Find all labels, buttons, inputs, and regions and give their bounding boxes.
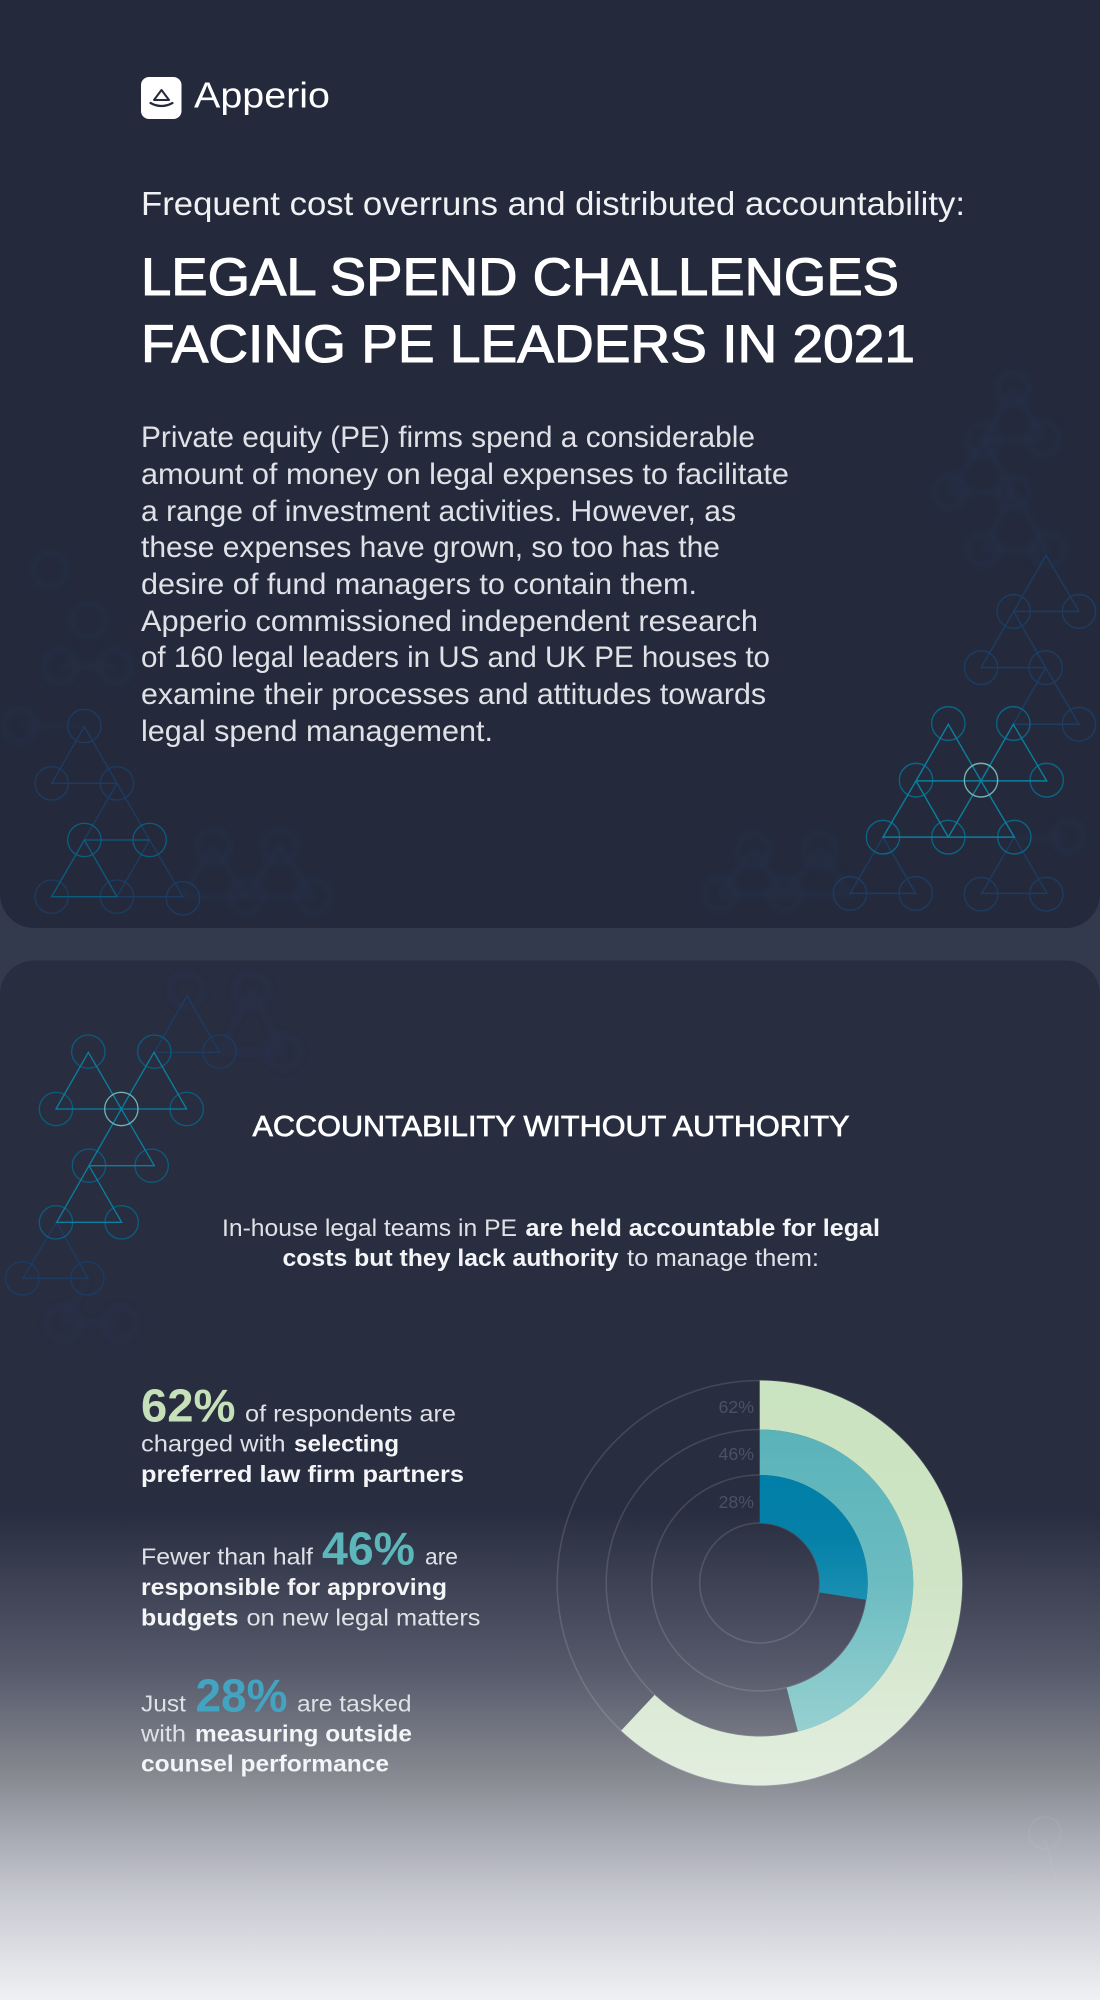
chart label: 62%: 62% <box>718 1397 754 1417</box>
subtitle: Frequent cost overruns and distributed accountability: <box>141 185 965 222</box>
intro paragraph <box>141 421 789 748</box>
stat: 46%: on new legal matters <box>246 1604 480 1630</box>
stat: 28%: measuring outside <box>195 1720 412 1746</box>
intro paragraph: of 160 legal leaders in US and UK PE houses to <box>141 641 770 674</box>
stat: 28% <box>140 1670 412 1776</box>
stat: 62%: of respondents are <box>245 1400 456 1426</box>
chart arc: 62% <box>621 1380 962 1785</box>
stat: 46%: 46% <box>322 1522 415 1574</box>
stat: 46% <box>141 1522 480 1630</box>
section intro text <box>222 1215 880 1272</box>
intro paragraph: Private equity (PE) firms spend a considerable <box>141 421 755 454</box>
stat: 46%: are <box>425 1544 458 1570</box>
stat: 28%: are tasked <box>297 1690 412 1716</box>
panel: intro <box>0 0 1100 928</box>
section intro text: In-house legal teams in PE <box>222 1215 517 1242</box>
intro paragraph: examine their processes and attitudes towards <box>141 678 766 711</box>
section intro text: are held accountable for legal <box>526 1215 880 1242</box>
title: LEGAL SPEND CHALLENGES <box>141 248 899 307</box>
logo wordmark: Apperio <box>194 74 330 116</box>
stat: 28%: with <box>140 1720 186 1746</box>
stat: 28%: Just <box>141 1690 186 1716</box>
radial bar chart <box>557 1380 962 1786</box>
stat: 62%: charged with <box>141 1430 286 1456</box>
section intro text: costs but they lack authority <box>282 1245 619 1272</box>
panel: accountability without authority <box>0 960 1100 2000</box>
icon: Apperio mark <box>141 77 182 119</box>
stat: 28%: 28% <box>196 1670 288 1722</box>
chart label: 28%: 28% <box>718 1492 754 1512</box>
stat: 28%: counsel performance <box>141 1750 389 1776</box>
stat: 46%: budgets <box>141 1604 238 1630</box>
chart arc: 28% <box>760 1475 868 1600</box>
intro paragraph: Apperio commissioned independent research <box>141 605 758 638</box>
pattern: faint lower-right network <box>997 1817 1097 1910</box>
chart arc: 46% <box>760 1429 913 1732</box>
title: FACING PE LEADERS IN 2021 <box>141 315 915 374</box>
pattern: left triangle network <box>3 553 330 915</box>
intro paragraph: desire of fund managers to contain them. <box>141 568 697 601</box>
section heading: ACCOUNTABILITY WITHOUT AUTHORITY <box>252 1111 850 1143</box>
section intro text: to manage them: <box>627 1245 819 1272</box>
logo <box>141 74 330 119</box>
pattern: upper-left triangle network <box>6 973 300 1340</box>
intro paragraph: legal spend management. <box>141 715 493 748</box>
stat: 46%: responsible for approving <box>141 1574 447 1600</box>
stat: 62%: selecting <box>294 1430 399 1456</box>
stat: 62% <box>141 1380 464 1487</box>
intro paragraph: a range of investment activities. However, as <box>141 495 736 528</box>
stat: 62%: 62% <box>141 1380 236 1432</box>
pattern: right triangle network <box>704 373 1096 911</box>
stat: 46%: Fewer than half <box>141 1544 313 1570</box>
stat: 62%: preferred law firm partners <box>141 1461 464 1487</box>
intro paragraph: these expenses have grown, so too has the <box>141 531 720 564</box>
title <box>141 248 915 374</box>
intro paragraph: amount of money on legal expenses to facilitate <box>141 458 789 491</box>
chart label: 46%: 46% <box>718 1444 754 1464</box>
